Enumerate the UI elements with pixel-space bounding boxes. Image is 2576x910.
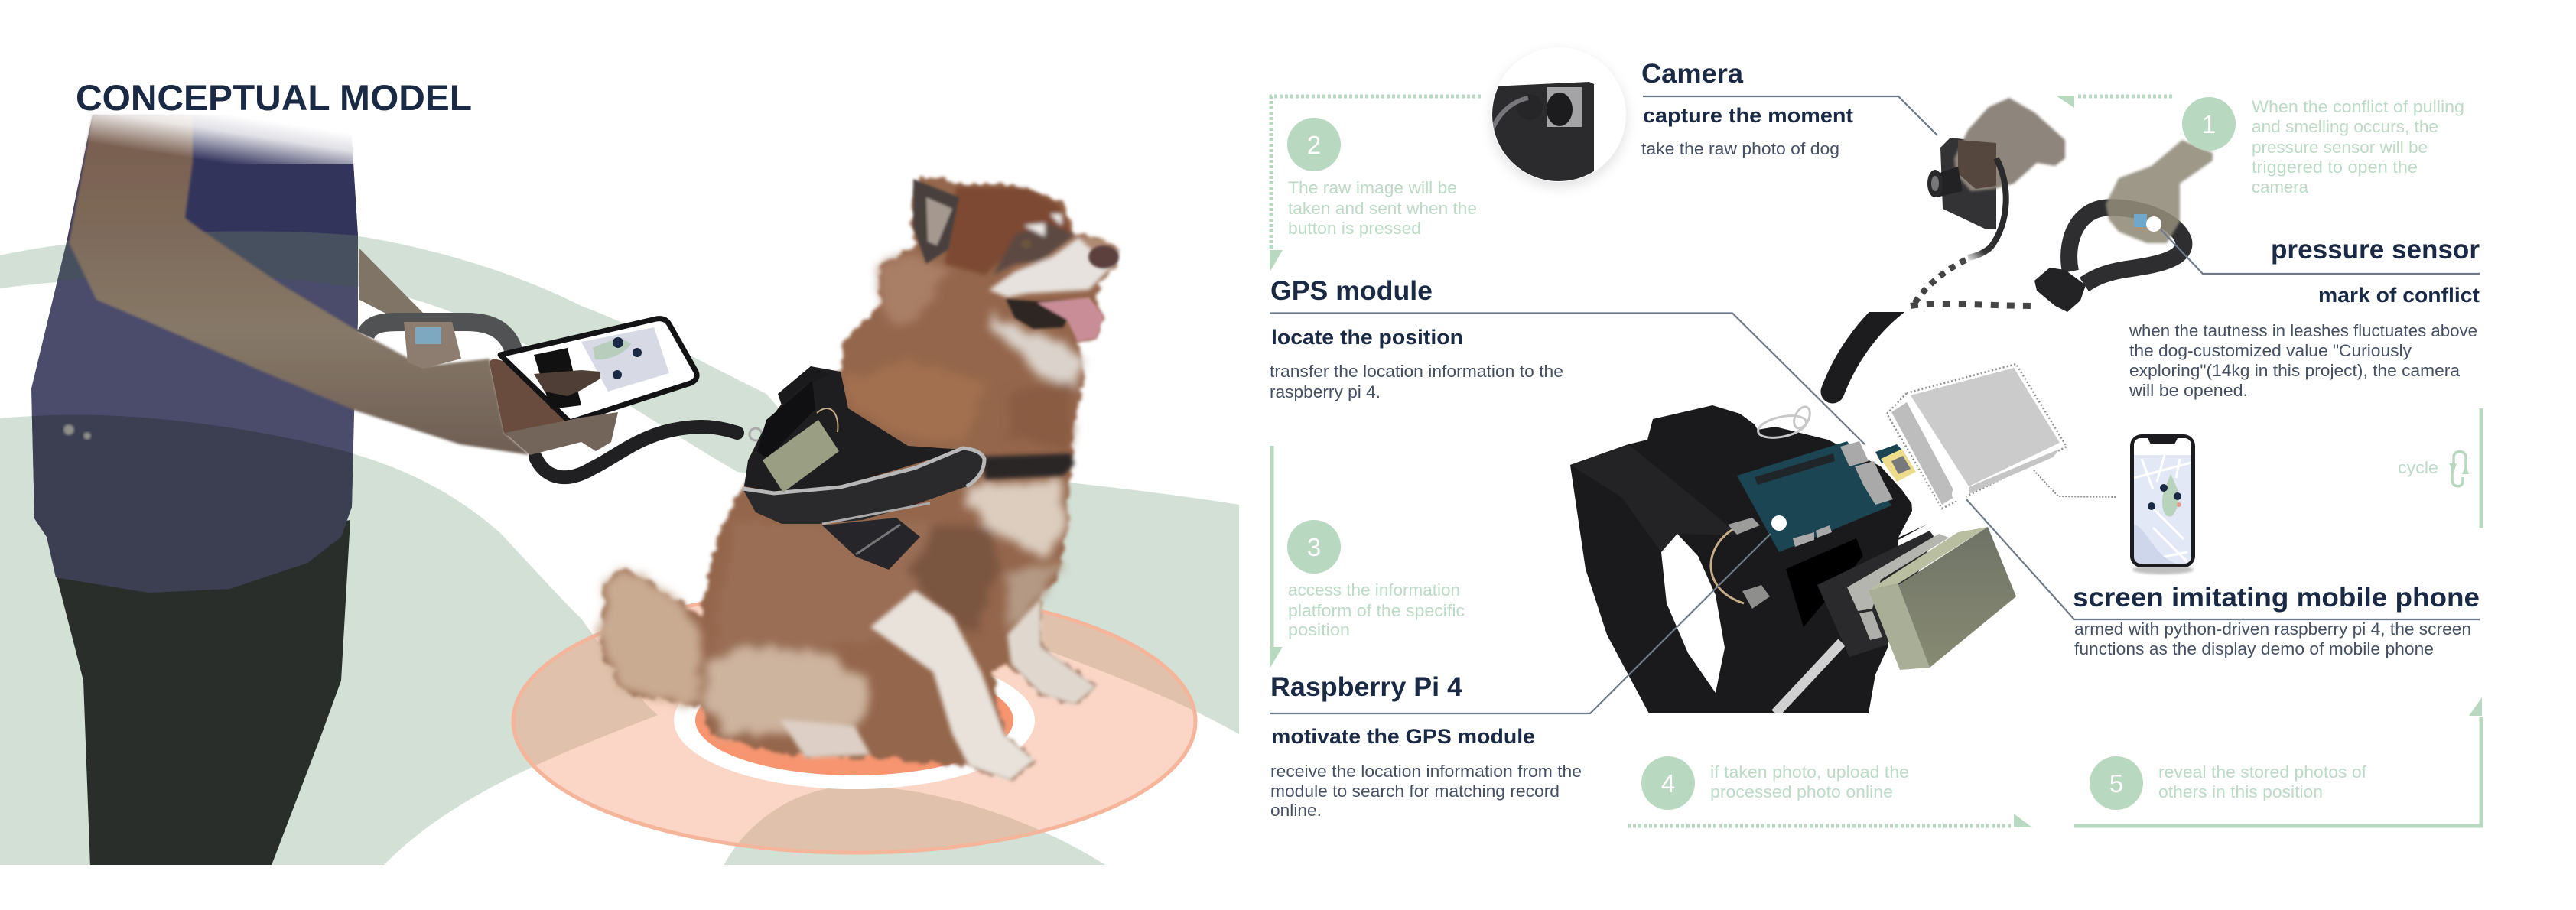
dotted arrow to step 5 [1628, 814, 2032, 827]
background green wave shapes [0, 232, 1239, 867]
step 5 text: others in this position [2158, 782, 2323, 801]
hand fingers on handle [404, 322, 461, 369]
step 1 text: triggered to open the [2252, 158, 2418, 177]
icon: cycle arrows [2449, 451, 2469, 486]
connector and wire [1711, 518, 1770, 609]
cycle indicator [2398, 408, 2481, 528]
cycle label: cycle [2398, 458, 2438, 477]
description: pressure sensor [2129, 321, 2477, 400]
step number 3 [1287, 520, 1341, 574]
tube and dashed wires [1833, 260, 2034, 392]
solid arrow back up [2074, 697, 2482, 826]
flow step 5 [2074, 697, 2482, 826]
heading: Raspberry Pi 4: Raspberry Pi 4 [1270, 672, 1463, 702]
flow step 4 [1628, 756, 2032, 827]
step 4 text: processed photo online [1710, 782, 1893, 801]
step number 5 [2090, 756, 2143, 810]
battery pack [1817, 527, 2016, 670]
description: screen: armed with python-driven raspberry pi 4, the screen [2074, 619, 2471, 639]
screen module [1887, 364, 2116, 509]
description: pressure sensor: exploring"(14kg in this project), the camera [2129, 361, 2461, 380]
description: pressure sensor: when the tautness in leashes fluctuates above [2129, 321, 2477, 340]
description: Raspberry Pi: receive the location information from the [1270, 762, 1582, 781]
step 3 text: access the information [1288, 580, 1460, 600]
dotted arrow to GPS [1270, 96, 1481, 272]
description: pressure sensor: will be opened. [2129, 381, 2248, 400]
subheading: capture the moment: capture the moment [1643, 104, 1853, 127]
heading: camera: Camera [1641, 59, 1744, 89]
panel: Raspberry Pi 4 [1270, 534, 1771, 820]
dog harness with device [743, 366, 1075, 570]
description: Raspberry Pi: online. [1270, 801, 1322, 820]
step 1 text: camera [2252, 177, 2309, 197]
title: CONCEPTUAL MODEL [76, 77, 472, 118]
icon: camera close-up circle [1488, 72, 1629, 190]
step number 4 [1641, 756, 1695, 810]
leader line: camera [1643, 96, 1937, 135]
panel: screen imitating mobile phone [1966, 499, 2480, 658]
description: screen [2074, 619, 2471, 658]
step 1 text: pressure sensor will be [2252, 138, 2428, 157]
panel: conceptual model scene [0, 107, 1239, 867]
flow step 3 [1270, 446, 1465, 668]
step 3 text [1288, 580, 1465, 639]
step 5 text [2158, 762, 2367, 801]
description: screen: functions as the display demo of mobile phone [2074, 639, 2434, 658]
flow step 2 [1270, 96, 1481, 272]
panel: GPS module [1270, 276, 1865, 444]
cycle line [2480, 408, 2483, 528]
description: pressure sensor: the dog-customized value "Curiously [2129, 341, 2412, 360]
step number 2: 2 [1307, 131, 1321, 159]
subheading: locate the position: locate the position [1271, 326, 1463, 349]
icon: pressure sensor handle with hand [2034, 140, 2213, 312]
step 3 text: platform of the specific [1288, 601, 1465, 620]
step number 3: 3 [1307, 533, 1321, 561]
step 1 text: When the conflict of pulling [2252, 97, 2464, 116]
step number 1: 1 [2202, 110, 2216, 138]
harness body [1570, 405, 1927, 713]
orange location disc [513, 590, 1195, 853]
flow step 1 [2056, 96, 2464, 197]
description: Raspberry Pi: module to search for matching record [1270, 782, 1560, 801]
mobile phone [2130, 434, 2195, 574]
description: GPS: transfer the location information to the [1270, 362, 1563, 381]
description: Raspberry Pi [1270, 762, 1582, 820]
leash handle and tube [366, 322, 762, 477]
leader line: GPS [1270, 314, 1865, 444]
step 5 text: reveal the stored photos of [2158, 762, 2367, 782]
step 2 text [1288, 178, 1477, 238]
step number 4: 4 [1661, 769, 1675, 798]
smartphone with map [490, 319, 697, 455]
subheading: motivate the GPS module: motivate the GPS module [1271, 725, 1535, 748]
step 4 text [1710, 762, 1909, 801]
GPS chip [1875, 444, 1916, 482]
leader line: pressure sensor [2161, 229, 2480, 274]
step 2 text: The raw image will be [1288, 178, 1457, 197]
panel: camera [1491, 47, 1937, 187]
person [23, 107, 530, 867]
panel: pressure sensor [2129, 229, 2480, 400]
heading: GPS module: GPS module [1270, 276, 1433, 306]
dotted arrow to camera [2056, 96, 2172, 108]
icon: camera module [1927, 98, 2065, 258]
solid arrow to Raspberry Pi [1270, 446, 1283, 668]
leader line: screen [1966, 499, 2480, 619]
heading: pressure sensor: pressure sensor [2271, 235, 2480, 265]
description: GPS [1270, 362, 1563, 401]
Raspberry Pi board [1737, 441, 1893, 552]
step 4 text: if taken photo, upload the [1710, 762, 1909, 782]
step 1 text: and smelling occurs, the [2252, 117, 2438, 136]
step number 5: 5 [2109, 769, 2123, 798]
key rings [1756, 405, 1813, 441]
step number 1 [2182, 97, 2236, 151]
step 2 text: button is pressed [1288, 219, 1421, 238]
description: camera: take the raw photo of dog [1641, 139, 1839, 158]
step 2 text: taken and sent when the [1288, 199, 1477, 218]
subheading: mark of conflict: mark of conflict [2318, 284, 2480, 307]
step 3 text: position [1288, 620, 1350, 639]
step 1 text [2252, 97, 2464, 197]
panel: exploded device render [1570, 98, 2213, 713]
heading: screen: screen imitating mobile phone [2073, 583, 2480, 613]
description: GPS: raspberry pi 4. [1270, 382, 1381, 401]
dog [600, 175, 1119, 781]
step number 2 [1287, 118, 1341, 171]
leader line: Raspberry Pi [1270, 534, 1771, 713]
